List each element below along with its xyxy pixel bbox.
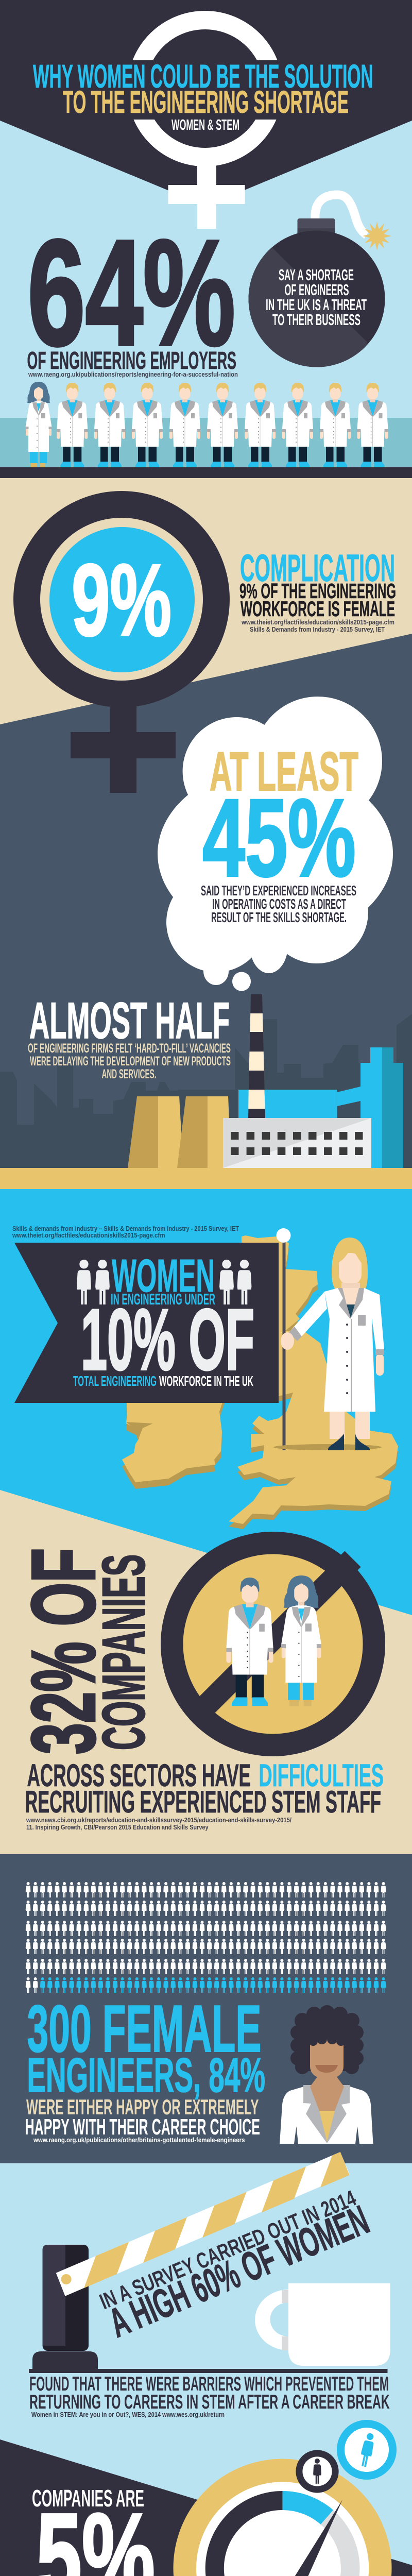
- stat: 64%: 64%: [28, 209, 235, 377]
- text: difficulties recruiting: ACROSS SECTORS HAVE: [27, 1758, 251, 1793]
- title: [33, 58, 373, 133]
- icon: dark badge woman: [296, 2450, 339, 2493]
- source: raeng: www.raeng.org.uk/publications/reports/engineering-for-a-successful-nation: [28, 370, 238, 378]
- stat: 9%: 9%: [72, 543, 171, 657]
- text: companies, rotated: COMPANIES: [90, 1554, 157, 1750]
- icon: white venus symbol: [127, 11, 283, 229]
- background: beige section: [0, 478, 412, 736]
- text: barriers: [29, 2373, 390, 2418]
- source: skills and demands: [12, 1225, 239, 1239]
- icon: factory: [128, 994, 403, 1168]
- background: dark header pentagon: [0, 0, 412, 206]
- source: skills and demands: Skills & demands from industry – Skills & Demands from Industry - 2015 Survey, IET: [12, 1225, 239, 1232]
- icon: dark venus symbol with 9%: [13, 491, 230, 793]
- title: WOMEN & STEM: [171, 117, 239, 133]
- text: 300 female engineers: [25, 1992, 265, 2144]
- smoke cloud with 45% stat: [158, 697, 393, 991]
- text: complication: Skills & Demands from Industry - 2015 Survey, IET: [250, 625, 385, 633]
- text: women in engineering: WOMEN: [112, 1250, 215, 1302]
- background: header section: [0, 0, 412, 478]
- text: bomb message: [266, 266, 367, 329]
- text: 300 female engineers: www.raeng.org.uk/publications/other/britains-gottalented-female-engineers: [33, 2136, 245, 2144]
- icon: prohibition sign with engineers: [161, 1532, 385, 1756]
- icon: barrier post: [29, 2245, 387, 2373]
- row of engineers: one woman and nine men: [26, 382, 388, 467]
- banner: IN ENGINEERING UNDER: [111, 1291, 215, 1308]
- text: almost half: ALMOST HALF: [29, 992, 230, 1049]
- text: operating costs: [201, 883, 356, 925]
- background: slate pictogram section: [0, 1854, 412, 2163]
- text: difficulties recruiting: [25, 1758, 384, 1819]
- background: beige diagonal section: [0, 1490, 412, 1854]
- text: bomb message: SAY A SHORTAGE: [279, 266, 354, 284]
- source: skills and demands: www.theiet.org/factfiles/education/skills2015-page.cfm: [12, 1231, 165, 1239]
- map: UK and Ireland: [122, 1235, 398, 1529]
- background: teal band: [0, 418, 412, 467]
- text: bomb message: OF ENGINEERS: [284, 281, 349, 299]
- background: dark floor: [0, 467, 412, 478]
- background: gold ground: [0, 1168, 412, 1189]
- background: city skyline: [0, 1014, 412, 1168]
- text: complication: www.theiet.org/factfiles/education/skills2015-page.cfm: [241, 618, 394, 626]
- icon: bomb: [237, 195, 391, 376]
- stat: 10% of: 10% OF: [81, 1291, 254, 1388]
- title band: [0, 60, 412, 120]
- text: almost half: AND SERVICES.: [102, 1067, 157, 1081]
- flag pole: [276, 1228, 290, 1450]
- text: companies are 5% more likely: [30, 2485, 391, 2576]
- figure: smiling woman portrait: [280, 2005, 373, 2144]
- stat: 32% of, rotated: 32% OF: [13, 1548, 113, 1754]
- icon: blue badge woman: [337, 2420, 397, 2480]
- banner: [14, 1243, 279, 1403]
- source: CBI: [26, 1816, 291, 1831]
- text: total engineering workforce: TOTAL ENGINEERING: [73, 1373, 157, 1389]
- background: dark diagonal section: [0, 2439, 412, 2576]
- chart: gender diversity gauge: [174, 2459, 391, 2576]
- icon: striped barrier arm: [56, 2152, 350, 2296]
- text: survey, rotated: [96, 2186, 375, 2346]
- text: companies are 5% more likely: COMPANIES ARE: [32, 2485, 144, 2512]
- text: complication: [239, 547, 396, 633]
- text: of engineering employers: OF ENGINEERING EMPLOYERS: [27, 347, 236, 375]
- icon: coffee mug: [255, 2283, 390, 2366]
- text: almost half: WERE DELAYING THE DEVELOPMENT OF NEW PRODUCTS: [30, 1055, 231, 1069]
- banner: WORKFORCE IN THE UK: [159, 1373, 253, 1389]
- pictogram: 300 female engineers: [26, 1882, 386, 1993]
- background: blue section: [0, 1189, 412, 1854]
- background: slate section: [0, 634, 412, 1168]
- figure: woman engineer holding flag: [273, 1238, 384, 1450]
- text: almost half: [28, 992, 231, 1081]
- text: barriers: Women in STEM: Are you in or Out?, WES, 2014 www.wes.org.uk/return: [31, 2411, 225, 2418]
- source: CBI: www.news.cbi.org.uk/reports/education-and-skillssurvey-2015/education-and-skills-survey-2015/: [26, 1816, 291, 1824]
- icons: women figures: [77, 1260, 251, 1304]
- text: almost half: OF ENGINEERING FIRMS FELT ‘HARD-TO-FILL’ VACANCIES: [28, 1042, 231, 1056]
- source: CBI: 11. Inspiring Growth, CBI/Pearson 2015 Education and Skills Survey: [26, 1823, 209, 1831]
- background: light blue section: [0, 2163, 412, 2576]
